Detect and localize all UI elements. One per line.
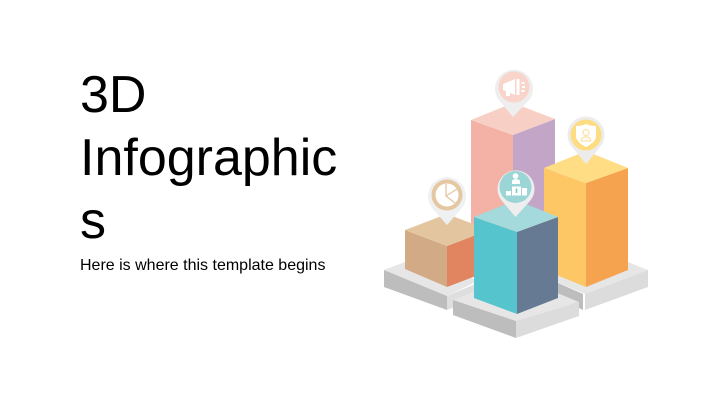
icon: shield — [576, 124, 596, 147]
platform: left — [384, 262, 480, 310]
subtitle: Here is where this template begins — [80, 257, 325, 274]
column: pink — [471, 103, 555, 240]
platform: centre — [453, 276, 579, 338]
column: teal — [474, 200, 558, 314]
pin: shield — [568, 116, 605, 164]
title: s — [80, 192, 106, 250]
column: yellow — [544, 151, 628, 287]
pin: pie chart — [428, 177, 466, 225]
platform: right — [540, 262, 648, 310]
icon: pie chart — [436, 184, 458, 206]
icon: megaphone — [503, 79, 525, 96]
title — [80, 66, 337, 250]
pin: megaphone — [495, 70, 533, 117]
pin: podium — [498, 170, 534, 217]
title: Infographic — [80, 129, 337, 187]
column: tan — [405, 214, 489, 287]
title: 3D — [80, 66, 146, 124]
icon: podium — [506, 173, 527, 196]
